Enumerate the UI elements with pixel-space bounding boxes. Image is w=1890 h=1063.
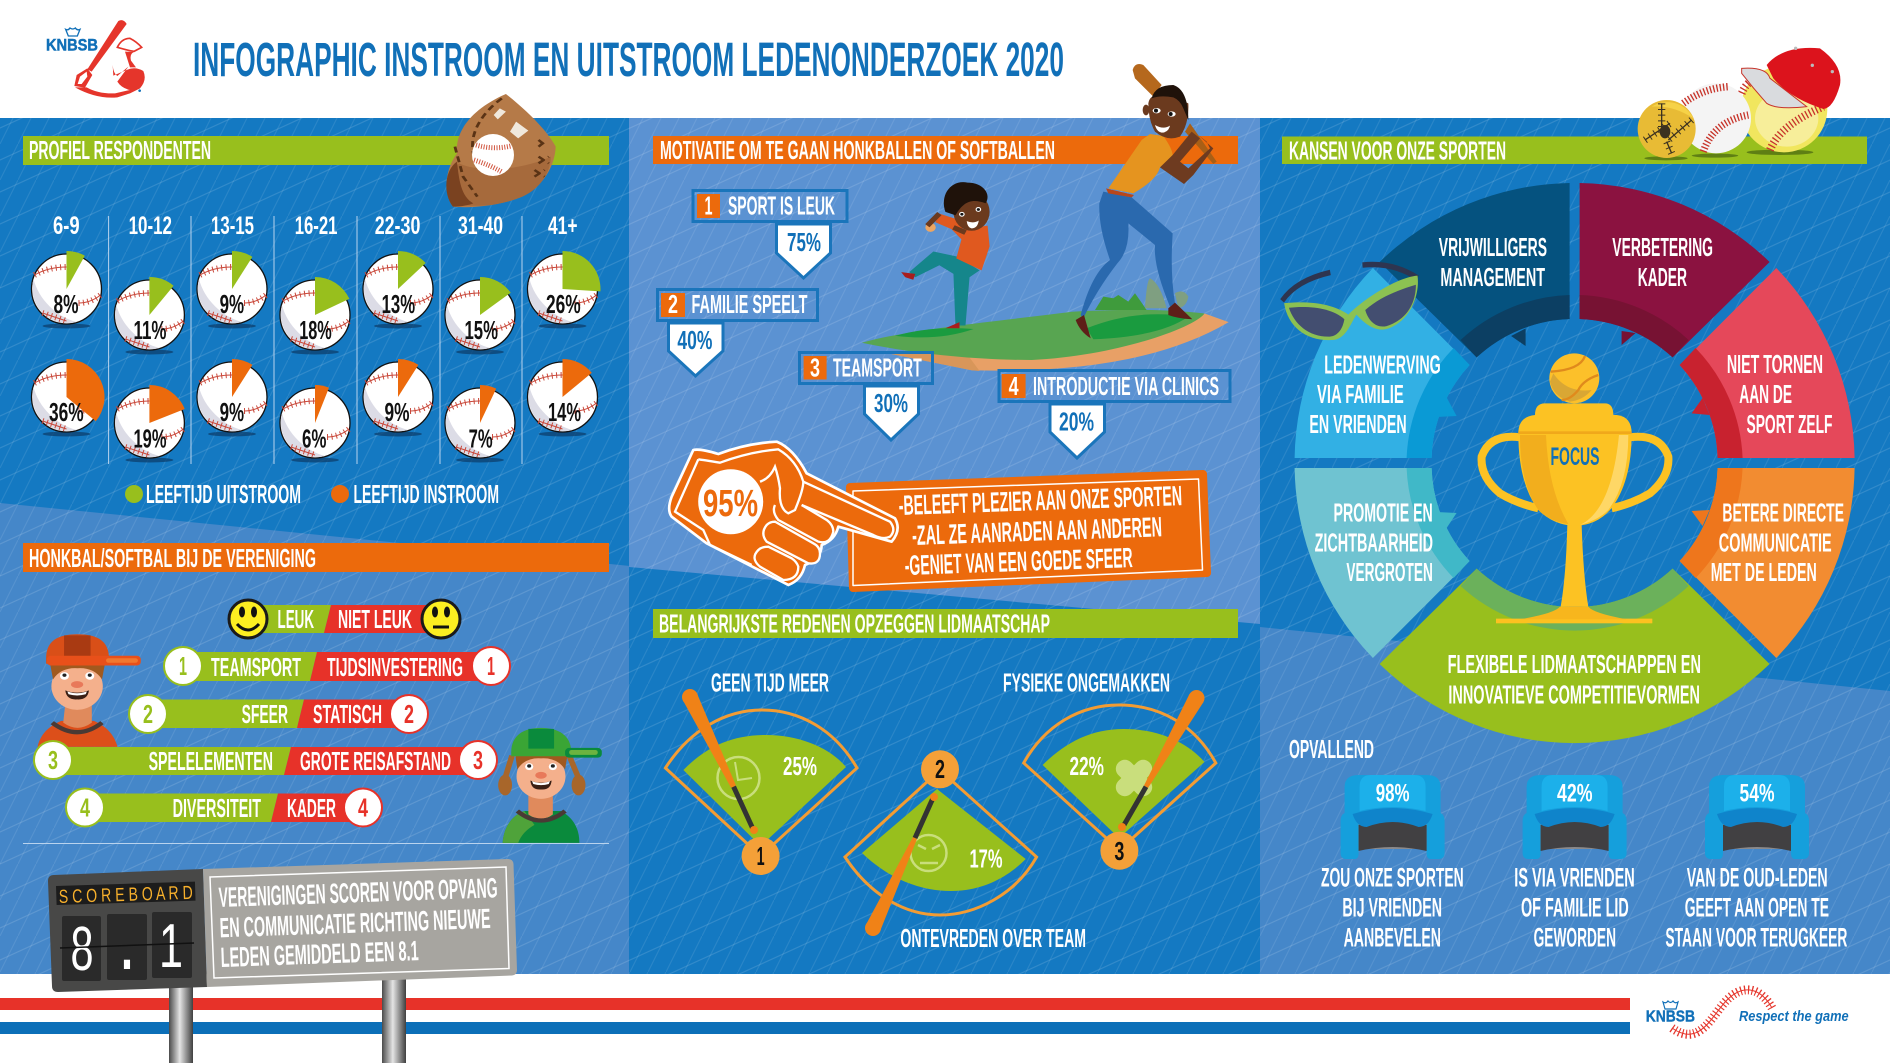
row 4: diversiteit / kader: 4: [358, 792, 368, 822]
logo: KNBSB batter: KNBSB: [46, 36, 98, 54]
row 2: sfeer / statisch: 2: [143, 699, 153, 729]
icon: glove with ball: [446, 94, 556, 207]
age headers: 13-15: [211, 212, 254, 240]
stat: 42%: OF FAMILIE LID: [1521, 893, 1629, 923]
ball: 22-30 uitstroom 13%: [363, 251, 433, 328]
wheel labels: PROMOTIE EN: [1334, 497, 1433, 527]
age headers: 10-12: [129, 212, 172, 240]
segment: niet tornen aan de sport zelf: [1680, 268, 1855, 458]
scoreboard message: [203, 859, 517, 987]
wheel labels: VERBETERING: [1612, 232, 1713, 262]
ball: 10-12 instroom 19%: [114, 385, 185, 462]
row 3: spelelementen / grote reisafstand: [34, 741, 497, 779]
wheel: segments: [1295, 183, 1855, 743]
reason 3: teamsport 30%: TEAMSPORT: [833, 352, 922, 382]
ball: 31-40 instroom 7%: 7%: [469, 424, 493, 454]
heading: motivatie: MOTIVATIE OM TE GAAN HONKBALLEN OF SOFTBALLEN: [660, 135, 1055, 165]
ball: 16-21 instroom 6%: [280, 385, 350, 462]
scoreboard panel: .: [121, 914, 133, 983]
ball: 41+ instroom 14%: [528, 359, 598, 436]
icon: trophy: [1482, 353, 1668, 623]
reason 2: familie speelt 40%: 2: [668, 289, 678, 319]
stat: 42%: 42%: [1557, 780, 1592, 808]
stat: 54%: [1665, 775, 1847, 953]
wheel labels: INNOVATIEVE COMPETITIEVORMEN: [1448, 680, 1700, 710]
reason 3: teamsport 30%: [800, 352, 932, 440]
chart: fysieke ongemakken 22%: 3: [1114, 836, 1124, 866]
row 4: diversiteit / kader: KADER: [287, 793, 336, 823]
trophy label: FOCUS: [1550, 443, 1600, 471]
row 2: sfeer / statisch: SFEER: [242, 699, 288, 729]
heading: opvallend: OPVALLEND: [1289, 734, 1374, 764]
chart: geen tijd meer 25%: GEEN TIJD MEER: [711, 668, 829, 698]
segment: flexibele lidmaatschappen: [1380, 569, 1770, 743]
chart: geen tijd meer 25%: [665, 668, 857, 875]
stat: 98%: BIJ VRIENDEN: [1342, 893, 1442, 923]
chart: geen tijd meer 25%: 1: [757, 841, 765, 871]
legend: LEEFTIJD INSTROOM: [354, 479, 499, 509]
wheel labels: EN VRIENDEN: [1309, 409, 1407, 439]
chart: fysieke ongemakken 22%: 22%: [1070, 751, 1104, 781]
chart: ontevreden over team 17%: [845, 750, 1086, 953]
illustration: girl with green cap: [498, 728, 602, 843]
chart: fysieke ongemakken 22%: FYSIEKE ONGEMAKKEN: [1003, 668, 1170, 698]
panel: belangrijkste redenen: [653, 609, 1238, 953]
reason 1: sport is leuk 75%: 1: [704, 191, 712, 221]
footer logo: KNBSB respect the game: Respect the game: [1739, 1008, 1849, 1025]
sign posts: [169, 973, 406, 1063]
scoreboard message: EN COMMUNICATIE RICHTING NIEUWE: [219, 903, 491, 943]
row 2: sfeer / statisch: STATISCH: [313, 699, 382, 729]
icon: foam finger 95%: [669, 442, 898, 585]
ball: 6-9 uitstroom 8%: 8%: [54, 289, 78, 319]
panel: profiel respondenten: [23, 94, 609, 509]
scoreboard panel: 1: [159, 912, 183, 981]
reason 1: sport is leuk 75%: 75%: [787, 227, 821, 257]
scoreboard panel: [48, 869, 207, 992]
row 4: diversiteit / kader: DIVERSITEIT: [173, 793, 261, 823]
heading: honkbal/softbal: HONKBAL/SOFTBAL BIJ DE VERENIGING: [29, 543, 316, 573]
illustration: boy with orange cap: [38, 634, 141, 747]
stat: 54%: 54%: [1740, 780, 1774, 808]
chart: ontevreden over team 17%: 2: [935, 754, 945, 784]
ball: 31-40 uitstroom 15%: [445, 277, 515, 354]
callout: banner: [850, 474, 1207, 588]
ball: 22-30 instroom 9%: 9%: [384, 397, 410, 427]
heading: kansen: KANSEN VOOR ONZE SPORTEN: [1289, 136, 1506, 166]
stat: 98%: 98%: [1376, 780, 1410, 808]
callout: banner: -GENIET VAN EEN GOEDE SFEER: [904, 542, 1133, 581]
reason 2: familie speelt 40%: 40%: [677, 325, 712, 355]
row 1: teamsport / tijdsinvestering: TIJDSINVESTERING: [327, 652, 463, 682]
icon: sunglasses: [1282, 265, 1418, 340]
reason 1: sport is leuk 75%: SPORT IS LEUK: [728, 191, 835, 221]
row 3: spelelementen / grote reisafstand: GROTE REISAFSTAND: [300, 746, 451, 776]
age headers: 41+: [548, 212, 578, 240]
stat: 98%: ZOU ONZE SPORTEN: [1321, 863, 1464, 893]
ball: 13-15 instroom 9%: [197, 359, 267, 436]
ball: 16-21 uitstroom 18%: 18%: [299, 315, 332, 345]
row 1: teamsport / tijdsinvestering: 1: [179, 651, 187, 681]
wheel labels: VIA FAMILIE: [1317, 379, 1404, 409]
row: leuk / niet leuk: NIET LEUK: [338, 604, 412, 634]
reason 2: familie speelt 40%: [658, 289, 818, 376]
ball: 6-9 instroom 36%: [32, 359, 105, 436]
chart: ontevreden over team 17%: ONTEVREDEN OVER TEAM: [900, 923, 1086, 953]
wheel labels: KADER: [1638, 262, 1687, 292]
age headers: 16-21: [295, 212, 338, 240]
logo: KNBSB batter: [46, 20, 145, 98]
segment: vrijwilligers management: [1380, 183, 1570, 357]
row 1: teamsport / tijdsinvestering: TEAMSPORT: [211, 652, 301, 682]
row 3: spelelementen / grote reisafstand: SPELELEMENTEN: [149, 746, 273, 776]
icon: balls and cap: [1638, 47, 1840, 160]
wheel labels: AAN DE: [1739, 379, 1792, 409]
ball: 6-9 instroom 36%: 36%: [49, 397, 84, 427]
ball: 10-12 instroom 19%: 19%: [134, 424, 166, 454]
chart: geen tijd meer 25%: 25%: [783, 751, 817, 781]
ball: 6-9 uitstroom 8%: [32, 251, 102, 328]
footer stripes: [0, 998, 1630, 1034]
wheel labels: LEDENWERVING: [1324, 349, 1441, 379]
icon: foam finger 95%: 95%: [703, 483, 758, 525]
row 2: sfeer / statisch: 2: [404, 699, 414, 729]
title: INFOGRAPHIC INSTROOM EN UITSTROOM LEDENONDERZOEK 2020: [193, 34, 1064, 87]
scoreboard sign: [48, 859, 517, 1063]
wheel labels: ZICHTBAARHEID: [1315, 528, 1433, 558]
segment: betere directe communicatie: [1680, 468, 1855, 658]
heading: kansen: [1282, 136, 1867, 166]
ball: 10-12 uitstroom 11%: [114, 277, 184, 354]
row 2: sfeer / statisch: [129, 695, 428, 733]
ball: 16-21 instroom 6%: 6%: [302, 424, 326, 454]
scoreboard panel: S C O R E B O A R D: [58, 883, 193, 908]
panel: honkbal/softbal bij de vereniging: [23, 543, 609, 844]
wheel labels: VERGROTEN: [1346, 557, 1433, 587]
segment: promotie en zichtbaarheid: [1295, 468, 1470, 658]
scoreboard panel: 8: [70, 915, 94, 984]
stat: 42%: GEWORDEN: [1534, 923, 1616, 953]
row 4: diversiteit / kader: 4: [80, 792, 90, 822]
reason 4: introductie via clinics 20%: [999, 370, 1230, 458]
row: leuk / niet leuk: [229, 600, 460, 638]
ball: 16-21 uitstroom 18%: [280, 277, 350, 354]
stat: 42%: [1514, 775, 1635, 953]
illustration: field: [862, 310, 1229, 371]
stat: 42%: IS VIA VRIENDEN: [1514, 863, 1635, 893]
scoreboard message: VERENIGINGEN SCOREN VOOR OPVANG: [218, 872, 498, 913]
row 3: spelelementen / grote reisafstand: 3: [48, 745, 58, 775]
stat: 98%: AANBEVELEN: [1344, 923, 1441, 953]
wheel labels: VRIJWILLIGERS: [1439, 232, 1547, 262]
wheel labels: MANAGEMENT: [1440, 262, 1545, 292]
ball: 22-30 uitstroom 13%: 13%: [382, 289, 415, 319]
segment: verbetering kader: [1580, 183, 1770, 357]
ball: 22-30 instroom 9%: [363, 359, 433, 436]
footer logo: KNBSB respect the game: KNBSB: [1646, 1009, 1695, 1026]
age headers: 31-40: [458, 212, 503, 240]
illustration: kid pitcher: [901, 182, 990, 328]
callout: banner: -ZAL ZE AANRADEN AAN ANDEREN: [912, 511, 1162, 551]
segment: ledenwerving: [1295, 268, 1470, 458]
reason 2: familie speelt 40%: FAMILIE SPEELT: [692, 289, 808, 319]
wheel labels: FLEXIBELE LIDMAATSCHAPPEN EN: [1448, 649, 1701, 679]
row 1: teamsport / tijdsinvestering: 1: [487, 651, 495, 681]
reason 4: introductie via clinics 20%: 4: [1009, 371, 1019, 401]
ball: 13-15 uitstroom 9%: [197, 251, 267, 328]
ball: 31-40 uitstroom 15%: 15%: [464, 315, 498, 345]
stat: 98%: [1321, 775, 1464, 953]
age headers: [53, 212, 578, 464]
reason 4: introductie via clinics 20%: INTRODUCTIE VIA CLINICS: [1033, 371, 1219, 401]
ball: 13-15 uitstroom 9%: 9%: [220, 289, 244, 319]
row 1: teamsport / tijdsinvestering: [164, 647, 510, 685]
heading: redenen opzeggen: BELANGRIJKSTE REDENEN OPZEGGEN LIDMAATSCHAP: [659, 609, 1050, 639]
scoreboard message: LEDEN GEMIDDELD EEN 8.1: [220, 935, 419, 973]
ball: 31-40 instroom 7%: [445, 385, 515, 462]
wheel labels: [1309, 232, 1844, 710]
ball: 41+ uitstroom 26%: [528, 251, 600, 328]
ball: 41+ uitstroom 26%: 26%: [546, 289, 581, 319]
footer logo: KNBSB respect the game: [1646, 990, 1849, 1034]
chart: ontevreden over team 17%: 17%: [970, 844, 1002, 874]
row: leuk / niet leuk: LEUK: [278, 604, 314, 634]
age headers: 6-9: [53, 212, 80, 240]
panel: kansen voor onze sporten: [1282, 47, 1867, 953]
illustration: batter: [1076, 64, 1217, 339]
chart: fysieke ongemakken 22%: [1003, 668, 1216, 870]
reason 4: introductie via clinics 20%: 20%: [1059, 406, 1094, 436]
age headers: 22-30: [375, 212, 420, 240]
reason 3: teamsport 30%: 3: [810, 352, 820, 382]
heading: profiel respondenten: [23, 135, 609, 165]
ball: 10-12 uitstroom 11%: 11%: [134, 315, 166, 345]
callout: banner: -BELEEFT PLEZIER AAN ONZE SPORTEN: [898, 480, 1183, 521]
legend: LEEFTIJD UITSTROOM: [146, 479, 301, 509]
ball: 41+ instroom 14%: 14%: [548, 397, 581, 427]
reason 1: sport is leuk 75%: [693, 190, 847, 278]
reason 3: teamsport 30%: 30%: [874, 388, 908, 418]
row 4: diversiteit / kader: [66, 788, 382, 826]
panel: motivatie: [653, 64, 1238, 588]
ball: 13-15 instroom 9%: 9%: [220, 397, 244, 427]
heading: profiel respondenten: PROFIEL RESPONDENTEN: [29, 135, 211, 165]
row 3: spelelementen / grote reisafstand: 3: [473, 745, 483, 775]
